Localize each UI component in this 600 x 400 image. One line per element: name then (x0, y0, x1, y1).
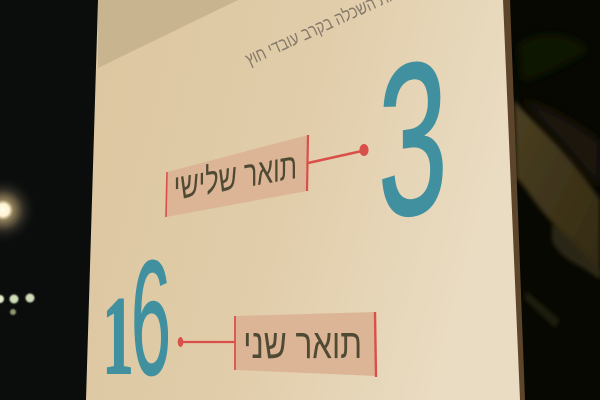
label: second degree: תואר שני (243, 320, 362, 367)
connector: third degree (308, 144, 369, 163)
top shaded band (98, 0, 238, 68)
light flare (0, 176, 37, 244)
number 16 (102, 226, 171, 400)
connector: second degree (178, 337, 235, 347)
label: third degree (166, 135, 308, 217)
background: dark trees right (505, 0, 600, 400)
distant lights (0, 294, 34, 315)
background: night sky left (0, 0, 100, 400)
board edge (502, 0, 525, 400)
tree trunk (514, 34, 600, 328)
label: second degree (235, 312, 376, 377)
number 3: 3 (378, 13, 448, 265)
label: third degree: תואר שלישי (174, 144, 297, 208)
number 16: 1 (102, 276, 134, 398)
board panel (86, 0, 520, 400)
